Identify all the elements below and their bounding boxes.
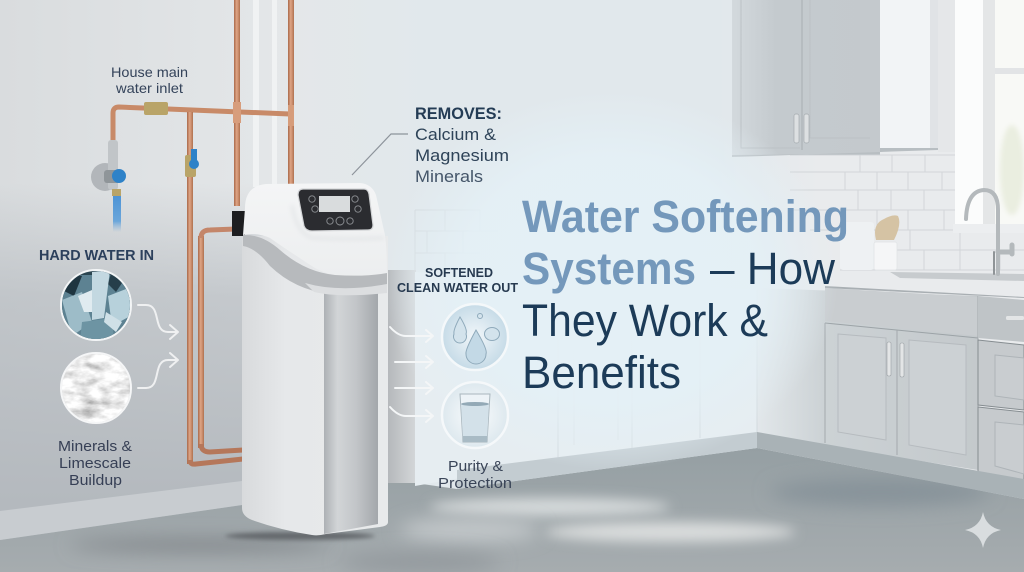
label: minerals and limescale buildup bbox=[58, 438, 132, 489]
head lip shading bbox=[292, 205, 384, 239]
silver collar band bbox=[243, 235, 387, 294]
heading: hard water in: HARD WATER IN bbox=[39, 248, 154, 264]
label: purity and protection: Purity & bbox=[448, 458, 503, 475]
softener shadow bbox=[225, 532, 375, 540]
silver front panel bbox=[324, 293, 378, 534]
icon: mineral crystals bbox=[60, 270, 134, 342]
callout leader line bbox=[352, 134, 408, 175]
background: left wall shading bbox=[0, 0, 320, 572]
window bbox=[938, 0, 1024, 233]
inline blue valve bbox=[185, 149, 199, 177]
arrows: softened water out bbox=[390, 327, 433, 422]
label: house main water inlet: House main bbox=[111, 64, 188, 80]
control panel bbox=[298, 189, 373, 231]
display screen bbox=[319, 196, 350, 212]
copper pipes bbox=[113, 0, 294, 464]
faded skirting under white cabinets bbox=[457, 432, 757, 489]
label: house main water inlet: water inlet bbox=[115, 80, 183, 96]
black inlet connector bbox=[232, 211, 245, 236]
label: purity and protection bbox=[438, 458, 512, 492]
title: – How bbox=[710, 243, 835, 294]
left skirting board bbox=[0, 481, 242, 540]
brass coupling bbox=[144, 102, 168, 115]
title: Benefits bbox=[522, 347, 681, 398]
heading: softened clean water out: CLEAN WATER OUT bbox=[397, 280, 518, 295]
label: purity and protection: Protection bbox=[438, 475, 512, 492]
main shut-off valve and hose bbox=[91, 140, 126, 232]
label: minerals and limescale buildup: Limescale bbox=[59, 455, 131, 472]
softener head bbox=[243, 183, 387, 277]
base cabinets bbox=[757, 288, 1024, 482]
base cabinet skirting bbox=[757, 432, 1024, 499]
softener body bbox=[242, 236, 388, 535]
canister and utensil crock bbox=[840, 215, 899, 270]
kitchen backsplash tiles bbox=[790, 155, 1024, 270]
icon: water droplets bbox=[442, 304, 508, 370]
callout: removes minerals: Calcium & bbox=[415, 125, 497, 144]
icon: glass of water bbox=[442, 382, 508, 448]
callout: removes minerals bbox=[415, 104, 509, 186]
label: minerals and limescale buildup: Minerals & bbox=[58, 438, 132, 455]
floor bbox=[0, 448, 1024, 572]
water softener unit bbox=[225, 183, 388, 540]
label: minerals and limescale buildup: Buildup bbox=[69, 472, 122, 489]
title: Systems bbox=[522, 243, 696, 294]
countertop with sink bbox=[825, 272, 1024, 298]
icon: limescale powder bbox=[60, 352, 132, 424]
title: They Work & bbox=[522, 295, 768, 346]
white plastic pipes bbox=[253, 0, 277, 187]
arrow: limescale into softener bbox=[138, 353, 178, 388]
title haze panel bbox=[382, 90, 838, 470]
callout: removes minerals: Magnesium bbox=[415, 146, 509, 165]
control buttons bbox=[309, 196, 361, 225]
heading: softened clean water out bbox=[397, 265, 518, 295]
heading: softened clean water out: SOFTENED bbox=[425, 265, 493, 280]
callout: removes minerals: Minerals bbox=[415, 167, 483, 186]
callout: removes minerals: REMOVES: bbox=[415, 104, 502, 123]
label: house main water inlet bbox=[111, 64, 188, 96]
arrow: minerals into softener bbox=[138, 305, 178, 339]
title: Water Softening bbox=[522, 191, 849, 242]
wall corner shadow bbox=[388, 270, 416, 485]
white faded lower cabinets bbox=[415, 272, 757, 486]
icon: sparkle watermark bbox=[965, 512, 1001, 548]
kitchen faucet bbox=[966, 190, 1012, 274]
upper wall cabinet bbox=[732, 0, 938, 157]
faint tiles behind softened water label bbox=[415, 210, 498, 270]
title bbox=[522, 191, 849, 398]
